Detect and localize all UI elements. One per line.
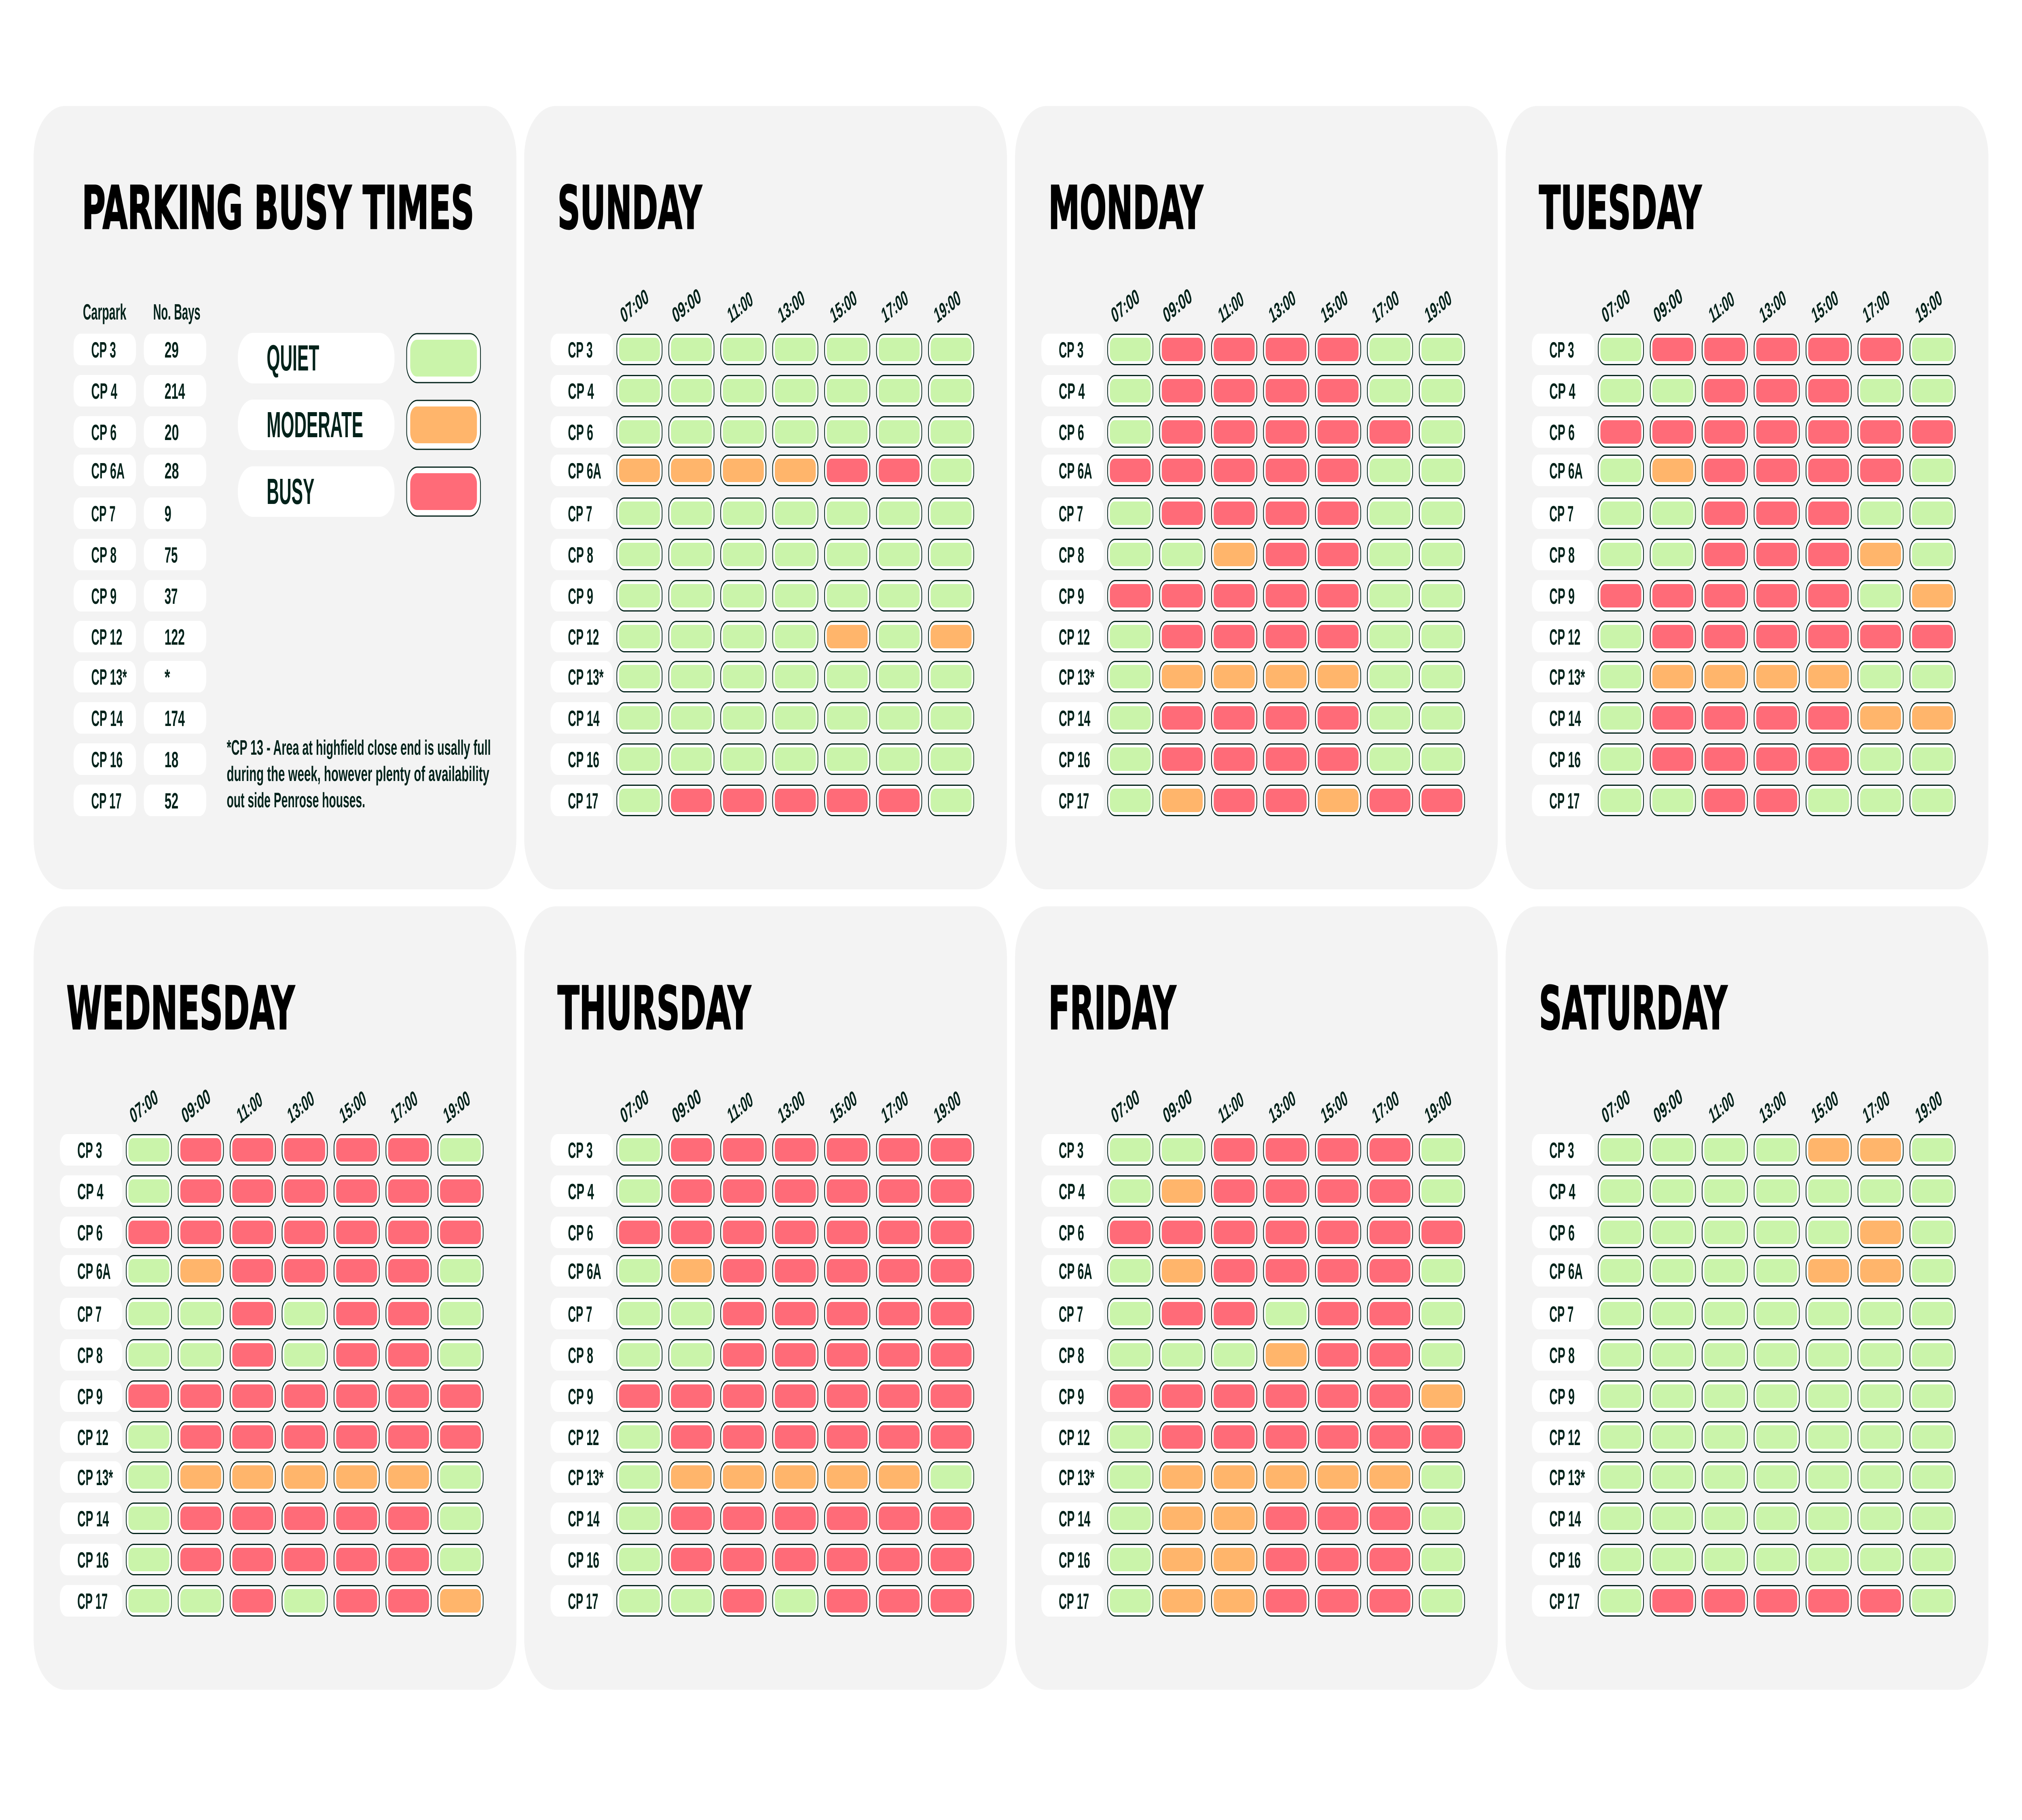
row: CP 9 [1532,580,1955,612]
row: CP 6: CP 6 [568,1220,593,1245]
row: CP 16: CP 16 [1549,1547,1581,1572]
row: CP 8 [550,1339,974,1371]
footnote: out side Penrose houses. [227,789,365,812]
row: CP 7 [1041,1298,1465,1329]
row: CP 4 [60,1175,483,1207]
row: CP 12: CP 12 [568,624,599,650]
row: CP 6: CP 6 [1059,420,1084,445]
row: CP 17: CP 17 [568,1589,598,1614]
time axis: 07:00 [1108,1084,1142,1128]
row: CP 12 [550,1421,974,1453]
time axis: 15:00 [1318,1086,1350,1128]
row: CP 7 [60,1298,483,1329]
row: CP 6: CP 6 [1059,1220,1084,1245]
row: CP 13* [1041,1461,1465,1493]
row: CP 4: CP 4 [77,1179,104,1204]
row: CP 14 [1532,1503,1955,1534]
row: CP 7 [550,1298,974,1329]
table row: CP 6: 20 [165,420,179,445]
row: CP 6A [1532,1255,1955,1287]
row: CP 4: CP 4 [568,379,594,404]
row: CP 6A: CP 6A [1549,1259,1583,1284]
time axis: 07:00 [1599,284,1633,328]
row: CP 6: CP 6 [1549,420,1575,445]
time axis: 13:00 [775,1086,807,1128]
row: CP 12: CP 12 [1059,1425,1090,1450]
row: CP 9 [1041,1380,1465,1412]
table row: CP 12 [74,621,206,652]
table row: CP 3: 29 [165,337,179,362]
row: CP 13*: CP 13* [77,1465,113,1490]
row: CP 9: CP 9 [1549,584,1575,609]
table row: CP 13* [74,661,206,692]
time axis: 17:00 [1370,285,1401,328]
row: CP 8 [1041,539,1465,570]
row: CP 16 [550,1544,974,1575]
row: CP 6A: CP 6A [1059,1259,1092,1284]
time axis: 19:00 [1422,1086,1454,1128]
row: CP 17 [1532,1585,1955,1617]
time axis: 15:00 [1809,285,1841,328]
table row: CP 16: 18 [165,747,178,772]
time axis: 11:00 [1706,1087,1737,1128]
row: CP 3 [550,334,974,365]
row: CP 16: CP 16 [568,1547,599,1572]
time axis: 19:00 [1913,285,1945,328]
table header: No. Bays: No. Bays [153,299,201,324]
time axis: 15:00 [827,285,859,328]
table row: CP 8: CP 8 [91,542,116,567]
time axis: 19:00 [1422,285,1454,328]
row: CP 14 [550,702,974,734]
time axis: 11:00 [234,1087,265,1128]
time axis [1108,1084,1454,1128]
heading: Wednesday: WEDNESDAY [66,973,295,1043]
panel: overview and legend [34,106,516,889]
row: CP 7 [1532,497,1955,529]
panel: Monday [1015,106,1498,889]
legend: busy: BUSY [266,471,315,512]
time axis: 09:00 [670,283,704,328]
title: PARKING BUSY TIMES [82,173,474,243]
row: CP 12: CP 12 [568,1425,599,1450]
row: CP 14: CP 14 [568,706,600,731]
table row: CP 8: 75 [165,542,178,567]
row: CP 17: CP 17 [1059,788,1089,813]
legend: moderate: MODERATE [266,404,363,445]
row: CP 12 [1532,621,1955,652]
panel: Saturday [1506,906,1988,1690]
row: CP 12 [1041,1421,1465,1453]
row: CP 3 [1532,334,1955,365]
row: CP 8: CP 8 [568,1343,593,1368]
row: CP 7: CP 7 [1549,1302,1574,1327]
row: CP 6 [1041,416,1465,448]
row: CP 6: CP 6 [1549,1220,1575,1245]
row: CP 8: CP 8 [77,1343,103,1368]
legend: quiet [238,333,480,383]
row: CP 6A [550,455,974,486]
panel: Friday [1015,906,1498,1690]
table row: CP 16: CP 16 [91,747,123,772]
row: CP 13*: CP 13* [1549,1465,1585,1490]
row: CP 8: CP 8 [1059,542,1084,567]
row: CP 8 [1532,539,1955,570]
row: CP 3: CP 3 [568,1138,593,1163]
row: CP 7: CP 7 [568,501,592,526]
row: CP 13* [1532,1461,1955,1493]
row: CP 9 [550,580,974,612]
row: CP 4 [550,375,974,406]
row: CP 8 [1532,1339,1955,1371]
row: CP 3 [1041,334,1465,365]
table row: CP 7: 9 [165,501,171,526]
row: CP 9: CP 9 [1549,1384,1575,1409]
table row: CP 14 [74,702,206,734]
row: CP 16 [550,743,974,775]
time axis: 11:00 [1216,286,1246,328]
table row: CP 9 [74,580,206,612]
row: CP 17 [60,1585,483,1617]
legend: moderate [238,400,480,450]
table row: CP 7 [74,497,206,529]
time axis: 09:00 [1651,1084,1685,1128]
row: CP 7: CP 7 [1059,501,1083,526]
row: CP 17 [1532,785,1955,816]
row: CP 7 [550,497,974,529]
table row: CP 12: CP 12 [91,624,123,650]
row: CP 12 [60,1421,483,1453]
row: CP 16: CP 16 [568,747,599,772]
time axis: 15:00 [337,1086,369,1128]
row: CP 7: CP 7 [1059,1302,1083,1327]
row: CP 6A [1041,1255,1465,1287]
heading: Saturday: SATURDAY [1539,973,1728,1043]
table row: CP 6: CP 6 [91,420,116,445]
table row: CP 14: 174 [165,706,185,731]
legend: busy [238,466,480,517]
row: CP 13*: CP 13* [1059,1465,1094,1490]
table row: CP 6 [74,416,206,448]
footnote: during the week, however plenty of availability [227,762,489,786]
row: CP 7: CP 7 [568,1302,592,1327]
row: CP 6A [1532,455,1955,486]
row: CP 8: CP 8 [1059,1343,1084,1368]
time axis: 07:00 [1599,1084,1633,1128]
row: CP 6A: CP 6A [1059,458,1092,483]
row: CP 6A [1041,455,1465,486]
row: CP 14: CP 14 [1059,1506,1091,1531]
row: CP 17 [1041,1585,1465,1617]
time axis: 09:00 [670,1084,704,1128]
row: CP 13* [60,1461,483,1493]
row: CP 4: CP 4 [1549,1179,1576,1204]
row: CP 17: CP 17 [1549,1589,1580,1614]
row: CP 12: CP 12 [1059,624,1090,650]
time axis: 09:00 [1160,1084,1194,1128]
row: CP 12 [1041,621,1465,652]
time axis: 17:00 [1860,1086,1892,1128]
row: CP 13*: CP 13* [568,1465,604,1490]
row: CP 13* [1041,661,1465,692]
row: CP 8 [550,539,974,570]
time axis [618,1084,963,1128]
table row: CP 16 [74,743,206,775]
time axis: 09:00 [1160,283,1194,328]
row: CP 14: CP 14 [1549,1506,1581,1531]
row: CP 13*: CP 13* [568,665,604,690]
time axis: 19:00 [931,285,963,328]
row: CP 16: CP 16 [1059,1547,1090,1572]
row: CP 16: CP 16 [1059,747,1090,772]
row: CP 12: CP 12 [77,1425,108,1450]
row: CP 9 [550,1380,974,1412]
row: CP 6 [1041,1217,1465,1248]
time axis [1599,283,1945,328]
time axis: 11:00 [725,286,755,328]
row: CP 4: CP 4 [1059,379,1085,404]
table row: CP 6A: 28 [165,458,179,483]
row: CP 14: CP 14 [77,1506,109,1531]
heading: Thursday: THURSDAY [558,973,751,1043]
row: CP 12 [1532,1421,1955,1453]
time axis: 07:00 [618,284,651,328]
table row: CP 3: CP 3 [91,337,116,362]
row: CP 3: CP 3 [1059,1138,1083,1163]
row: CP 12 [550,621,974,652]
row: CP 13*: CP 13* [1059,665,1094,690]
row: CP 6 [1532,416,1955,448]
row: CP 16: CP 16 [1549,747,1581,772]
row: CP 17 [1041,785,1465,816]
row: CP 6A: CP 6A [1549,458,1583,483]
panel: Sunday [524,106,1007,889]
row: CP 6 [1532,1217,1955,1248]
row: CP 4 [1532,375,1955,406]
row: CP 13* [1532,661,1955,692]
time axis: 19:00 [1913,1086,1945,1128]
panel: Tuesday [1506,106,1988,889]
row: CP 8: CP 8 [1549,542,1575,567]
heading: Sunday: SUNDAY [558,173,702,243]
row: CP 7: CP 7 [77,1302,102,1327]
time axis: 19:00 [441,1086,473,1128]
row: CP 14 [1532,702,1955,734]
table row: CP 14: CP 14 [91,706,123,731]
time axis: 11:00 [725,1087,755,1128]
time axis: 17:00 [388,1086,420,1128]
time axis: 11:00 [1706,286,1737,328]
row: CP 16 [1041,1544,1465,1575]
row: CP 12: CP 12 [1549,624,1580,650]
row: CP 3: CP 3 [1549,337,1574,362]
table row: CP 4: CP 4 [91,379,117,404]
table row: CP 6A: CP 6A [91,458,125,483]
row: CP 9: CP 9 [568,1384,593,1409]
row: CP 14 [550,1503,974,1534]
time axis: 07:00 [618,1084,651,1128]
row: CP 6: CP 6 [77,1220,103,1245]
row: CP 7 [1041,497,1465,529]
table row: CP 4: 214 [165,379,185,404]
row: CP 17 [550,785,974,816]
row: CP 16: CP 16 [77,1547,109,1572]
row: CP 17: CP 17 [1059,1589,1089,1614]
row: CP 8 [60,1339,483,1371]
row: CP 6A [60,1255,483,1287]
table row: CP 17 [74,785,206,816]
row: CP 16 [1041,743,1465,775]
row: CP 3 [1532,1134,1955,1166]
row: CP 9: CP 9 [1059,1384,1084,1409]
row: CP 8: CP 8 [1549,1343,1575,1368]
time axis: 17:00 [1860,285,1892,328]
time axis: 13:00 [775,285,807,328]
row: CP 14: CP 14 [1059,706,1091,731]
table row: CP 13*: * [165,665,170,690]
time axis: 09:00 [179,1084,213,1128]
time axis: 13:00 [1757,1086,1789,1128]
time axis: 13:00 [285,1086,317,1128]
row: CP 14 [1041,702,1465,734]
row: CP 6: CP 6 [568,420,593,445]
row: CP 17: CP 17 [568,788,598,813]
table row: CP 4 [74,375,206,406]
row: CP 9: CP 9 [1059,584,1084,609]
row: CP 8: CP 8 [568,542,593,567]
row: CP 4: CP 4 [1549,379,1576,404]
row: CP 13* [550,661,974,692]
table row: CP 13*: CP 13* [91,665,127,690]
row: CP 6A: CP 6A [568,1259,601,1284]
time axis: 15:00 [1318,285,1350,328]
row: CP 12: CP 12 [1549,1425,1580,1450]
row: CP 4: CP 4 [1059,1179,1085,1204]
row: CP 3 [1041,1134,1465,1166]
row: CP 9 [1041,580,1465,612]
row: CP 3: CP 3 [77,1138,102,1163]
row: CP 3: CP 3 [568,337,593,362]
row: CP 7 [1532,1298,1955,1329]
panel: Wednesday [34,906,516,1690]
row: CP 4 [1041,1175,1465,1207]
row: CP 16 [1532,743,1955,775]
row: CP 6 [60,1217,483,1248]
row: CP 14: CP 14 [568,1506,600,1531]
time axis: 13:00 [1266,1086,1298,1128]
time axis: 17:00 [879,1086,911,1128]
row: CP 3 [550,1134,974,1166]
table row: CP 6A [74,455,206,486]
time axis: 07:00 [127,1084,161,1128]
row: CP 6A: CP 6A [568,458,601,483]
table row: CP 8 [74,539,206,570]
row: CP 4 [1041,375,1465,406]
footnote: *CP 13 - Area at highfield close end is usally full [227,736,491,760]
time axis: 15:00 [1809,1086,1841,1128]
time axis: 11:00 [1216,1087,1246,1128]
row: CP 9 [1532,1380,1955,1412]
row: CP 17 [550,1585,974,1617]
row: CP 14 [60,1503,483,1534]
time axis [1599,1084,1945,1128]
heading: Friday: FRIDAY [1048,973,1176,1043]
row: CP 3: CP 3 [1549,1138,1574,1163]
row: CP 4: CP 4 [568,1179,594,1204]
table row: CP 17: 52 [165,788,178,813]
legend: quiet: QUIET [266,337,319,378]
heading: Monday: MONDAY [1048,173,1203,243]
row: CP 14 [1041,1503,1465,1534]
row: CP 4 [550,1175,974,1207]
row: CP 9 [60,1380,483,1412]
row: CP 16 [1532,1544,1955,1575]
row: CP 6A [550,1255,974,1287]
table row: CP 12: 122 [165,624,185,650]
row: CP 13* [550,1461,974,1493]
row: CP 7: CP 7 [1549,501,1574,526]
footnote [227,736,491,812]
row: CP 4 [1532,1175,1955,1207]
row: CP 14: CP 14 [1549,706,1581,731]
row: CP 3: CP 3 [1059,337,1083,362]
table row: CP 7: CP 7 [91,501,116,526]
row: CP 6 [550,416,974,448]
time axis: 15:00 [827,1086,859,1128]
time axis: 09:00 [1651,283,1685,328]
row: CP 6A: CP 6A [77,1259,111,1284]
row: CP 17: CP 17 [1549,788,1580,813]
row: CP 16 [60,1544,483,1575]
time axis: 07:00 [1108,284,1142,328]
panel: Thursday [524,906,1007,1690]
time axis: 17:00 [1370,1086,1401,1128]
table row: CP 3 [74,334,206,365]
row: CP 13*: CP 13* [1549,665,1585,690]
row: CP 9: CP 9 [77,1384,103,1409]
time axis: 17:00 [879,285,911,328]
heading: Tuesday: TUESDAY [1539,173,1702,243]
time axis [127,1084,473,1128]
time axis: 19:00 [931,1086,963,1128]
time axis: 13:00 [1757,285,1789,328]
row: CP 6 [550,1217,974,1248]
row: CP 8 [1041,1339,1465,1371]
row: CP 3 [60,1134,483,1166]
time axis [1108,283,1454,328]
row: CP 17: CP 17 [77,1589,108,1614]
table header: Carpark: Carpark [83,299,127,324]
row: CP 9: CP 9 [568,584,593,609]
time axis: 13:00 [1266,285,1298,328]
table row: CP 9: CP 9 [91,584,116,609]
table row: CP 9: 37 [165,584,178,609]
table row: CP 17: CP 17 [91,788,122,813]
time axis [618,283,963,328]
